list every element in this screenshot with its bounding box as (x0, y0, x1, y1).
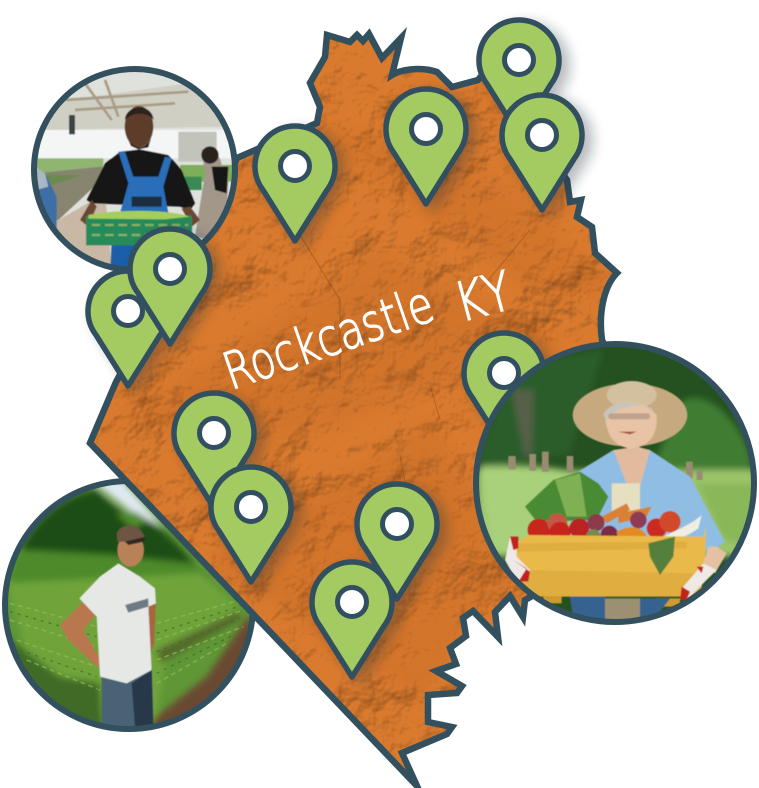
photo: farmer in corn field (8, 484, 250, 726)
pin: upper middle (255, 126, 335, 241)
map pins (88, 20, 582, 677)
leafy greens (525, 472, 608, 522)
woman's face (605, 402, 657, 448)
pin: top right front (502, 95, 582, 210)
wooden crate (517, 527, 706, 597)
pin: south front (312, 562, 392, 677)
pin: top right rear (479, 20, 559, 135)
crop rows (10, 600, 243, 690)
man's shirt (79, 563, 156, 683)
pin: south rear (357, 484, 437, 599)
pin: east (464, 333, 544, 448)
title: Rockcastle KY: KY (448, 259, 518, 335)
photo: farmer in greenhouse (25, 60, 240, 275)
crate (86, 216, 192, 245)
man's jeans (102, 667, 153, 727)
man's head (125, 106, 153, 147)
man's head (116, 540, 145, 568)
man's body (87, 149, 195, 210)
pin: lower left rear (174, 393, 254, 508)
left person (39, 176, 58, 229)
man's arms (60, 602, 100, 668)
pin: lower left front (211, 467, 291, 582)
gloves (505, 537, 530, 582)
pin: left rear (88, 271, 168, 386)
woman's hat (573, 383, 687, 447)
photo: farmer with vegetable crate (470, 340, 759, 630)
title: Rockcastle KY: Rockcastle (216, 276, 441, 402)
vegetables (602, 503, 652, 523)
pin: left front (130, 229, 210, 344)
woman in background (195, 148, 228, 240)
woman's shirt (570, 450, 725, 553)
pin: top centre (386, 89, 466, 204)
apron and legs (570, 597, 605, 620)
map: Rockcastle county (80, 30, 650, 788)
